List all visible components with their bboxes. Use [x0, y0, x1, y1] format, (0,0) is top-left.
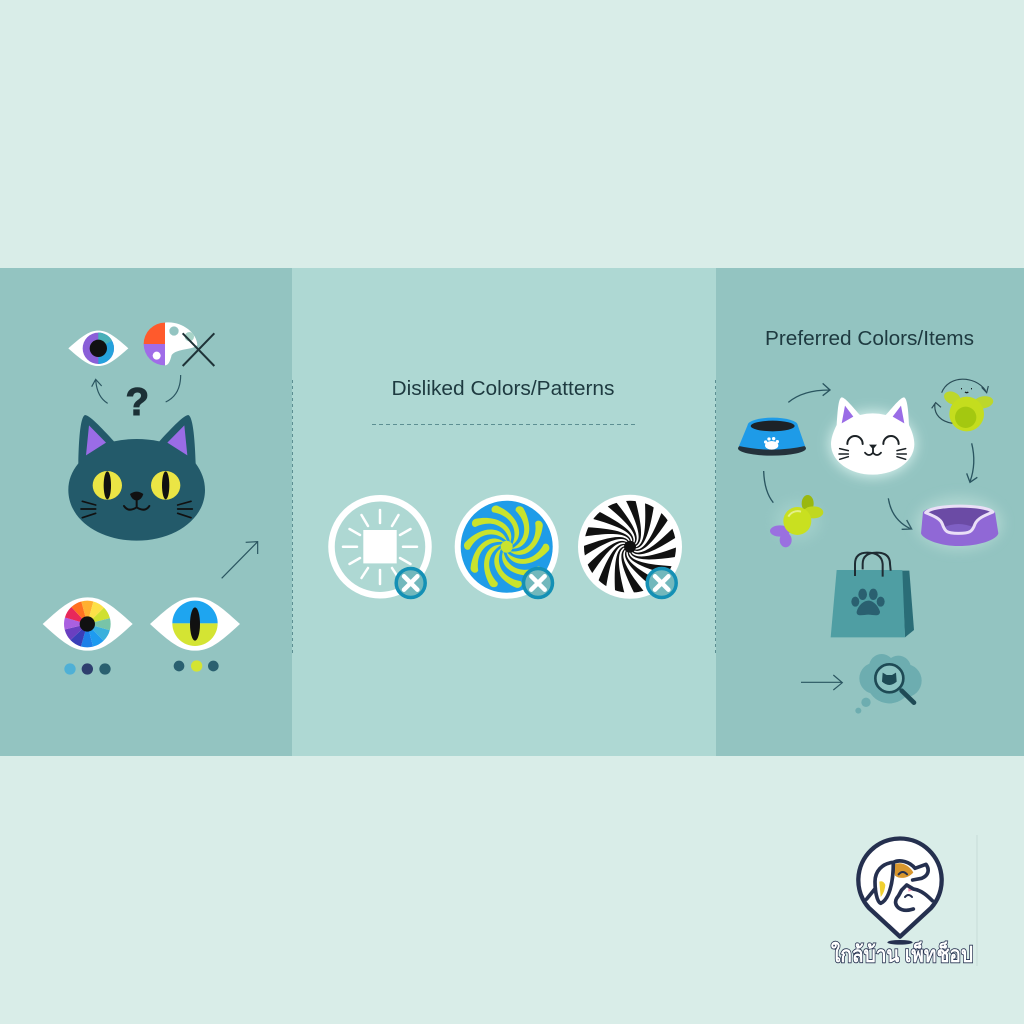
icon: shopping bag with paw	[831, 553, 914, 637]
heading: disliked: Disliked Colors/Patterns	[392, 378, 614, 400]
icon: crossed palette	[144, 322, 214, 366]
dog and cat line art	[867, 861, 932, 910]
arrow: ball to bed	[967, 443, 977, 482]
icon: lime ball toy	[932, 379, 994, 431]
icon: eye with purple iris	[68, 331, 128, 366]
arrow: cat to eye	[92, 379, 108, 403]
logo: pet shop pin	[831, 835, 977, 967]
panel: preferred colors and items	[716, 268, 1024, 756]
icon: blue and lime swirl	[455, 495, 559, 599]
arrow: upward diagonal	[222, 542, 258, 578]
pin outline	[858, 838, 942, 937]
arrow: candy to bowl	[764, 471, 773, 503]
logo art	[858, 838, 942, 945]
arrow: bowl to cat	[788, 383, 830, 402]
pin base	[887, 940, 913, 945]
legend dots: cat vision	[174, 660, 219, 672]
icon: purple cat bed	[916, 497, 1002, 550]
panel: cat vision	[0, 268, 292, 756]
panel: disliked colors and patterns	[292, 268, 716, 756]
badge: cross three	[647, 568, 676, 598]
badge: cross two	[524, 568, 552, 598]
icon: blue food bowl	[738, 418, 806, 456]
question mark: ?	[126, 381, 149, 424]
icon: human rainbow eye	[43, 597, 133, 651]
icon: cat slit eye	[150, 597, 240, 651]
cat and question group	[68, 322, 214, 541]
item cycle group	[738, 379, 994, 547]
arrow: palette to cat	[166, 375, 181, 402]
icon: thought bubble with magnifier	[855, 654, 922, 714]
badge: cross one	[396, 568, 425, 598]
heading: preferred: Preferred Colors/Items	[765, 328, 974, 350]
arrow: to thought bubble	[801, 675, 842, 690]
icon: happy white cat	[831, 397, 914, 475]
icon: dark cat	[68, 415, 205, 541]
legend dots: human vision	[64, 663, 111, 675]
logo wordmark: ใกล้บ้าน เพ็ทช็อป	[831, 940, 973, 967]
infographic canvas	[0, 268, 1024, 966]
shopping and search group	[801, 553, 922, 714]
arrow: cat to bed	[888, 498, 912, 529]
icon: candy toy	[770, 495, 823, 547]
icon: bright white square	[332, 498, 428, 595]
glow behind white cat	[829, 411, 916, 477]
eyes comparison group	[43, 542, 258, 675]
icon: black and white spiral	[578, 495, 682, 599]
